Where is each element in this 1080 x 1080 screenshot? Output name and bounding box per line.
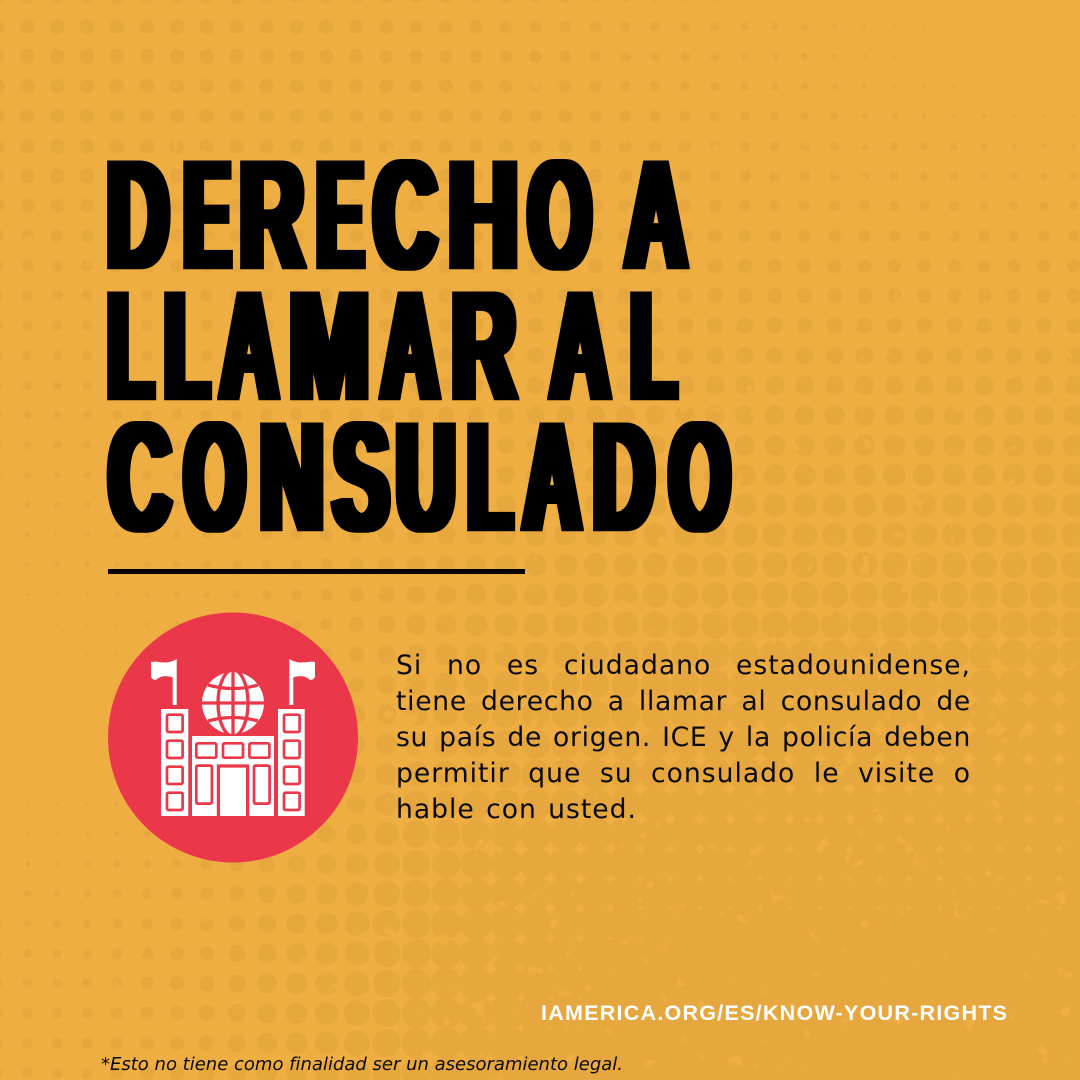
title: L <box>108 259 153 432</box>
body text block: Si no es ciudadano estadounidense, <box>396 650 971 681</box>
divider rule under title <box>108 569 525 574</box>
title: N <box>260 390 324 563</box>
title: M <box>289 259 370 432</box>
icon background circle <box>108 612 358 862</box>
icon: left tower <box>161 709 188 816</box>
title: A <box>220 259 278 432</box>
title: C <box>109 390 170 563</box>
body text block: tiene derecho a llamar al consulado de <box>396 686 971 717</box>
title: A <box>382 259 438 432</box>
title: H <box>448 128 518 301</box>
icon: left flag <box>151 659 177 705</box>
body text block: su país de origen. ICE y la policía deben <box>396 722 971 753</box>
icon: central building <box>192 736 274 816</box>
title <box>107 128 730 563</box>
title: O <box>184 390 245 563</box>
title: L <box>468 390 512 563</box>
title: U <box>396 390 455 563</box>
title: R <box>452 259 516 432</box>
title: R <box>240 128 304 301</box>
title: E <box>184 128 230 301</box>
title: O <box>669 390 730 563</box>
title: O <box>528 128 591 301</box>
icon: globe <box>202 670 264 736</box>
legal disclaimer footnote: *Esto no tiene como finalidad ser un asesoramiento legal. <box>101 1054 623 1075</box>
icon: consulate building with globe and flags <box>108 612 358 862</box>
body text block: hable con usted. <box>396 794 637 825</box>
title: C <box>374 128 436 301</box>
title: A <box>626 128 686 301</box>
title: D <box>107 128 169 301</box>
title: E <box>317 128 363 301</box>
body text block <box>396 650 971 825</box>
title: L <box>165 259 209 432</box>
body text block: permitir que su consulado le visite o <box>396 758 971 789</box>
title: A <box>524 390 580 563</box>
title: D <box>593 390 654 563</box>
title: S <box>333 390 389 563</box>
icon: right tower <box>278 709 305 816</box>
icon: right flag <box>289 659 315 705</box>
title: A <box>550 259 610 432</box>
website url: IAMERICA.ORG/ES/KNOW-YOUR-RIGHTS <box>541 1001 1007 1025</box>
title: L <box>631 259 676 432</box>
